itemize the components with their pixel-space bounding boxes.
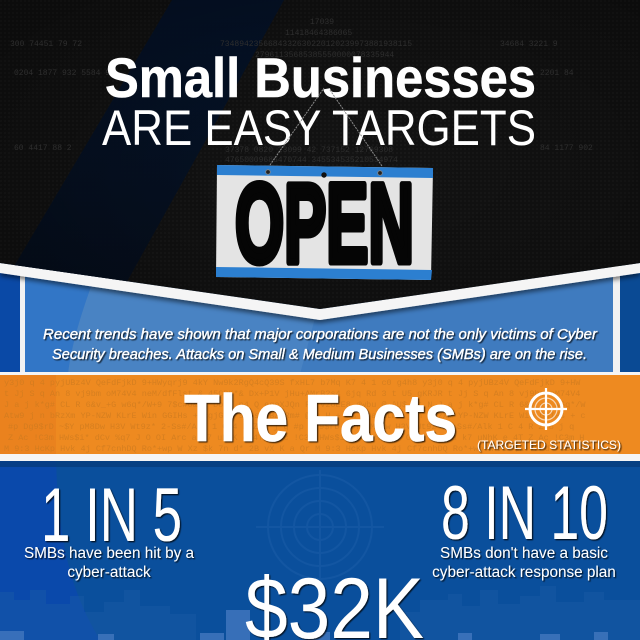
panel: dark header background: [0, 0, 640, 330]
skyline towers: [0, 610, 608, 640]
title line 2: ARE EASY TARGETS: [102, 100, 536, 156]
background digits: 27961135685385550000078335944: [255, 51, 394, 60]
background digits: 17039: [310, 18, 334, 27]
sign wires: [270, 88, 382, 166]
stat: 1 in 5: [24, 473, 195, 581]
skyline silhouette: [0, 586, 640, 640]
stat caption: cyber-attack: [67, 564, 151, 581]
stat caption: [432, 545, 616, 581]
stat caption: cyber-attack response plan: [432, 564, 616, 581]
background digits: 0204 1877 932 5584 90: [14, 69, 115, 78]
band background characters: [4, 378, 586, 454]
stat caption: [24, 545, 195, 581]
icon: target watermark: [256, 470, 384, 584]
background digits: 47650009686470744 345534535210534974: [225, 156, 398, 165]
band background characters: J a j k*g# CL R 6&v_+G w6q*/W+9 7$c#o& L*DocF p4 Q eqoXJQn Fe vzoEE8 dwbu @ ^U$ &t N J a j k*g# CL R 6&v_+G w6q*/W: [4, 400, 586, 410]
background digits: 300 74451 79 72: [10, 40, 82, 49]
background digits: 2201 84: [540, 69, 574, 78]
icon: crosshair target: [525, 388, 567, 430]
intro paragraph: [43, 327, 598, 363]
band background characters: Z Ac !C3m HWs$i* dCv %q7 J O OI Arc a k7 uNhK e 4T Z Ac !C3m HWs$i* dCv %q7 J O OI Arc a k7 uNhK e 4T Z Ac !C3m H: [8, 433, 584, 443]
band background characters: Atw9 j n bRzXm YP-NZW KLrE Win GGIHs + cgjG B'sA6sFrBZPRm# @ e H + S% y9a Atw9 j n bRzXm YP-NZW KLrE Win GGIHs + c: [4, 411, 586, 421]
panel: light blue intro box: [0, 262, 640, 378]
stat: 8 in 10: [432, 471, 616, 581]
background digits: [10, 18, 593, 165]
background digits: 37378 0820 23099 42 737152 12769308: [225, 146, 393, 155]
background digits: 7348942356684332630220120239973881938115: [220, 40, 412, 49]
stat figure: 1 IN 5: [41, 473, 182, 558]
intro paragraph: Security breaches. Attacks on Small & Medium Businesses (SMBs) are on the rise.: [52, 347, 587, 363]
background digits: 84 1177 902: [540, 144, 593, 153]
background digits: 60 4417 88 2: [14, 144, 72, 153]
background digits: 11418464386065: [285, 29, 352, 38]
chevron white band: [0, 263, 640, 320]
OPEN lettering: OPEN: [235, 161, 414, 286]
title line 1: Small Businesses: [105, 46, 536, 109]
background digits: 34684 3221 9: [500, 40, 558, 49]
intro paragraph: Recent trends have shown that major corporations are not the only victims of Cyber: [43, 327, 598, 343]
icon: open sign: [216, 88, 433, 286]
stat caption: SMBs have been hit by a: [24, 545, 195, 562]
stat caption: SMBs don't have a basic: [440, 545, 608, 562]
band background characters: #p Dg9$rD ~$Y pM8Dw H3V Wt9z* 2-Ss#/Alk 1 C 4 R Z 8 j q #p Dg9$rD ~$Y pM8Dw H3V Wt9z* 2-Ss#/Alk 1 C 4 R Z 8 j q: [8, 422, 574, 432]
panel: orange facts band: [0, 372, 640, 461]
subtitle: targeted statistics: (TARGETED STATISTICS): [477, 438, 621, 452]
band background characters: y3j0 q 4 pyjUBz4V QeFdFjkD 9+HWyqrj9 4kY Nw9k2RgQ4cQ39S fxHL7 b7Mq K7 4 1 c0 g4h8 y3j0 q 4 pyjUBz4V QeFdFjkD 9+HW: [4, 378, 581, 388]
band background characters: M 9:3 HcKp Hvk 4j Cf7cnhDQ Ro*+wp W Xz $k 7n d* 2B vX K a Qr M 9:3 HcKp Hvk 4j Cf7cnhDQ Ro*+wp W Xz $k 7n d* 2B vX: [4, 444, 586, 454]
heading: The Facts: The Facts: [184, 381, 457, 456]
band background characters: t Jj S q An 8 vj9bm oM74V4 neM/dfFlst & 45CBK*& Dx+P1V jHu+AMrB2s4 6jq Rd 3 t U5 gKRJR t Jj S q An 8 vj9bm oM74V4: [4, 389, 580, 399]
sign board: [216, 165, 433, 280]
panel: lower blue background: [0, 458, 640, 640]
